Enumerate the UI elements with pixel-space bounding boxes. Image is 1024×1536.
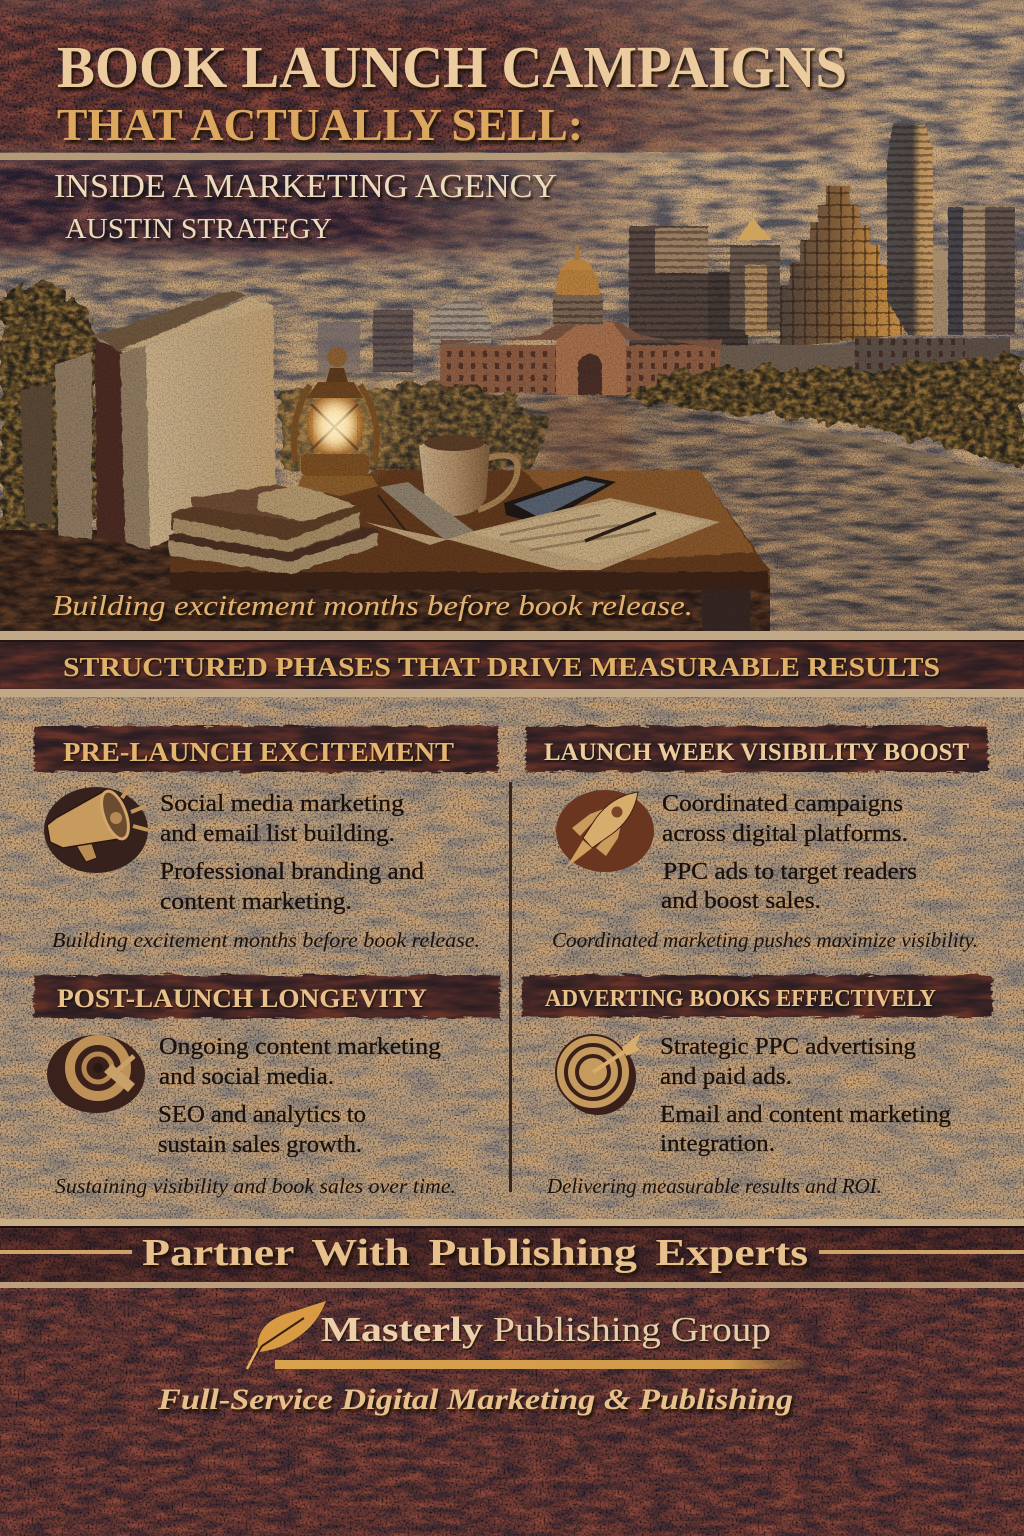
body text: content marketing.	[160, 889, 352, 915]
banner: structured phases	[0, 631, 1024, 697]
icon: megaphone	[44, 786, 148, 873]
title rule	[0, 153, 760, 160]
scene: river	[400, 395, 1024, 640]
icon: lantern	[265, 347, 405, 500]
page grain over scene	[0, 270, 1024, 640]
right tower	[948, 205, 1015, 336]
scene: table	[170, 470, 770, 632]
body text: and email list building.	[160, 821, 395, 847]
banner heading: STRUCTURED PHASES THAT DRIVE MEASURABLE RESULTS	[63, 652, 940, 682]
body text: across digital platforms.	[662, 821, 908, 847]
divider between columns	[509, 782, 512, 1192]
body text: and paid ads.	[660, 1064, 792, 1090]
banner	[34, 726, 498, 772]
scene caption: Building excitement months before book release.	[52, 590, 693, 622]
scene: warm glow at lantern	[317, 403, 353, 447]
background: sky texture	[0, 0, 1024, 640]
distant towers	[318, 297, 491, 372]
banner	[34, 975, 500, 1018]
tagline: Sustaining visibility and book sales over time.	[55, 1174, 456, 1198]
body text	[661, 791, 917, 914]
icon: phone	[504, 476, 616, 525]
heading: PRE-LAUNCH EXCITEMENT	[63, 737, 454, 767]
body text: SEO and analytics to	[158, 1102, 366, 1128]
scene: upright books	[20, 290, 276, 550]
cta heading with side rules	[0, 1232, 1024, 1274]
body text: PPC ads to target readers	[663, 859, 917, 885]
cta heading with side rules: Partner With Publishing Experts	[142, 1232, 808, 1274]
capitol	[440, 246, 722, 395]
body text: integration.	[660, 1131, 775, 1157]
wordmark: Masterly	[321, 1310, 484, 1349]
tall tower	[887, 123, 933, 335]
tagline: Building excitement months before book release.	[52, 928, 480, 952]
heading: LAUNCH WEEK VISIBILITY BOOST	[544, 739, 969, 766]
icon: bullseye	[556, 1032, 641, 1115]
body text: Professional branding and	[160, 859, 424, 885]
background: dark band behind the title	[0, 0, 876, 152]
body text	[160, 791, 424, 915]
title line 1: BOOK LAUNCH CAMPAIGNS	[57, 34, 847, 100]
scene: far bank strip	[760, 428, 1024, 484]
tagline: Delivering measurable results and ROI.	[546, 1174, 882, 1198]
panel: pre-launch excitement	[34, 726, 498, 952]
logo: Masterly Publishing Group: Publishing Group	[493, 1310, 771, 1349]
banner	[522, 975, 992, 1017]
icon: target with arrow	[47, 1035, 145, 1113]
crown tower	[708, 218, 780, 348]
heading: ADVERTING BOOKS EFFECTIVELY	[545, 986, 936, 1012]
icon: quill	[247, 1301, 326, 1369]
panel: advertising books effectively	[522, 975, 992, 1198]
body text	[660, 1034, 951, 1157]
scene: Austin skyline	[318, 123, 1015, 395]
body text: Strategic PPC advertising	[660, 1034, 916, 1060]
body text: Email and content marketing	[660, 1102, 951, 1128]
body text: Coordinated campaigns	[662, 791, 903, 817]
scene: left trees	[0, 282, 100, 540]
title line 2: THAT ACTUALLY SELL:	[57, 99, 583, 150]
heading: POST-LAUNCH LONGEVITY	[57, 984, 427, 1013]
body text: and boost sales.	[661, 888, 821, 914]
scene: capitol reflection	[540, 400, 640, 480]
body text: Social media marketing	[160, 791, 404, 817]
icon: rocket	[556, 790, 654, 872]
tagline: Coordinated marketing pushes maximize visibility.	[552, 928, 978, 952]
background: top edge haze	[0, 0, 1024, 30]
gold rule	[275, 1360, 810, 1369]
background: dusk band behind the subtitle	[0, 150, 643, 274]
tan midrise	[925, 250, 951, 336]
scene: papers and notebook	[365, 482, 720, 570]
panel: textured phases section	[0, 690, 1024, 1226]
office block	[629, 226, 708, 348]
subtitle line 2: AUSTIN STRATEGY	[65, 213, 332, 245]
panel: launch week visibility boost	[526, 726, 988, 952]
body text: sustain sales growth.	[158, 1132, 362, 1158]
scene: bushes behind lantern	[280, 382, 550, 470]
subtitle line 1: INSIDE A MARKETING AGENCY	[54, 168, 557, 205]
body text: and social media.	[159, 1064, 334, 1090]
panel: post-launch longevity	[34, 975, 500, 1198]
stepped tower	[780, 186, 903, 348]
body text: Ongoing content marketing	[159, 1034, 441, 1060]
title block	[54, 34, 847, 245]
tagline: Full-Service Digital Marketing & Publishing	[157, 1383, 793, 1416]
scene: stacked books	[168, 484, 378, 575]
footer background	[0, 1219, 1024, 1536]
body text	[158, 1034, 441, 1158]
scene: foreground ground	[0, 530, 770, 640]
logo: Masterly Publishing Group	[157, 1301, 810, 1416]
icon: coffee cup	[419, 435, 517, 516]
low building	[720, 338, 1010, 385]
banner	[526, 726, 988, 772]
scene: riverbank trees	[620, 352, 1024, 470]
